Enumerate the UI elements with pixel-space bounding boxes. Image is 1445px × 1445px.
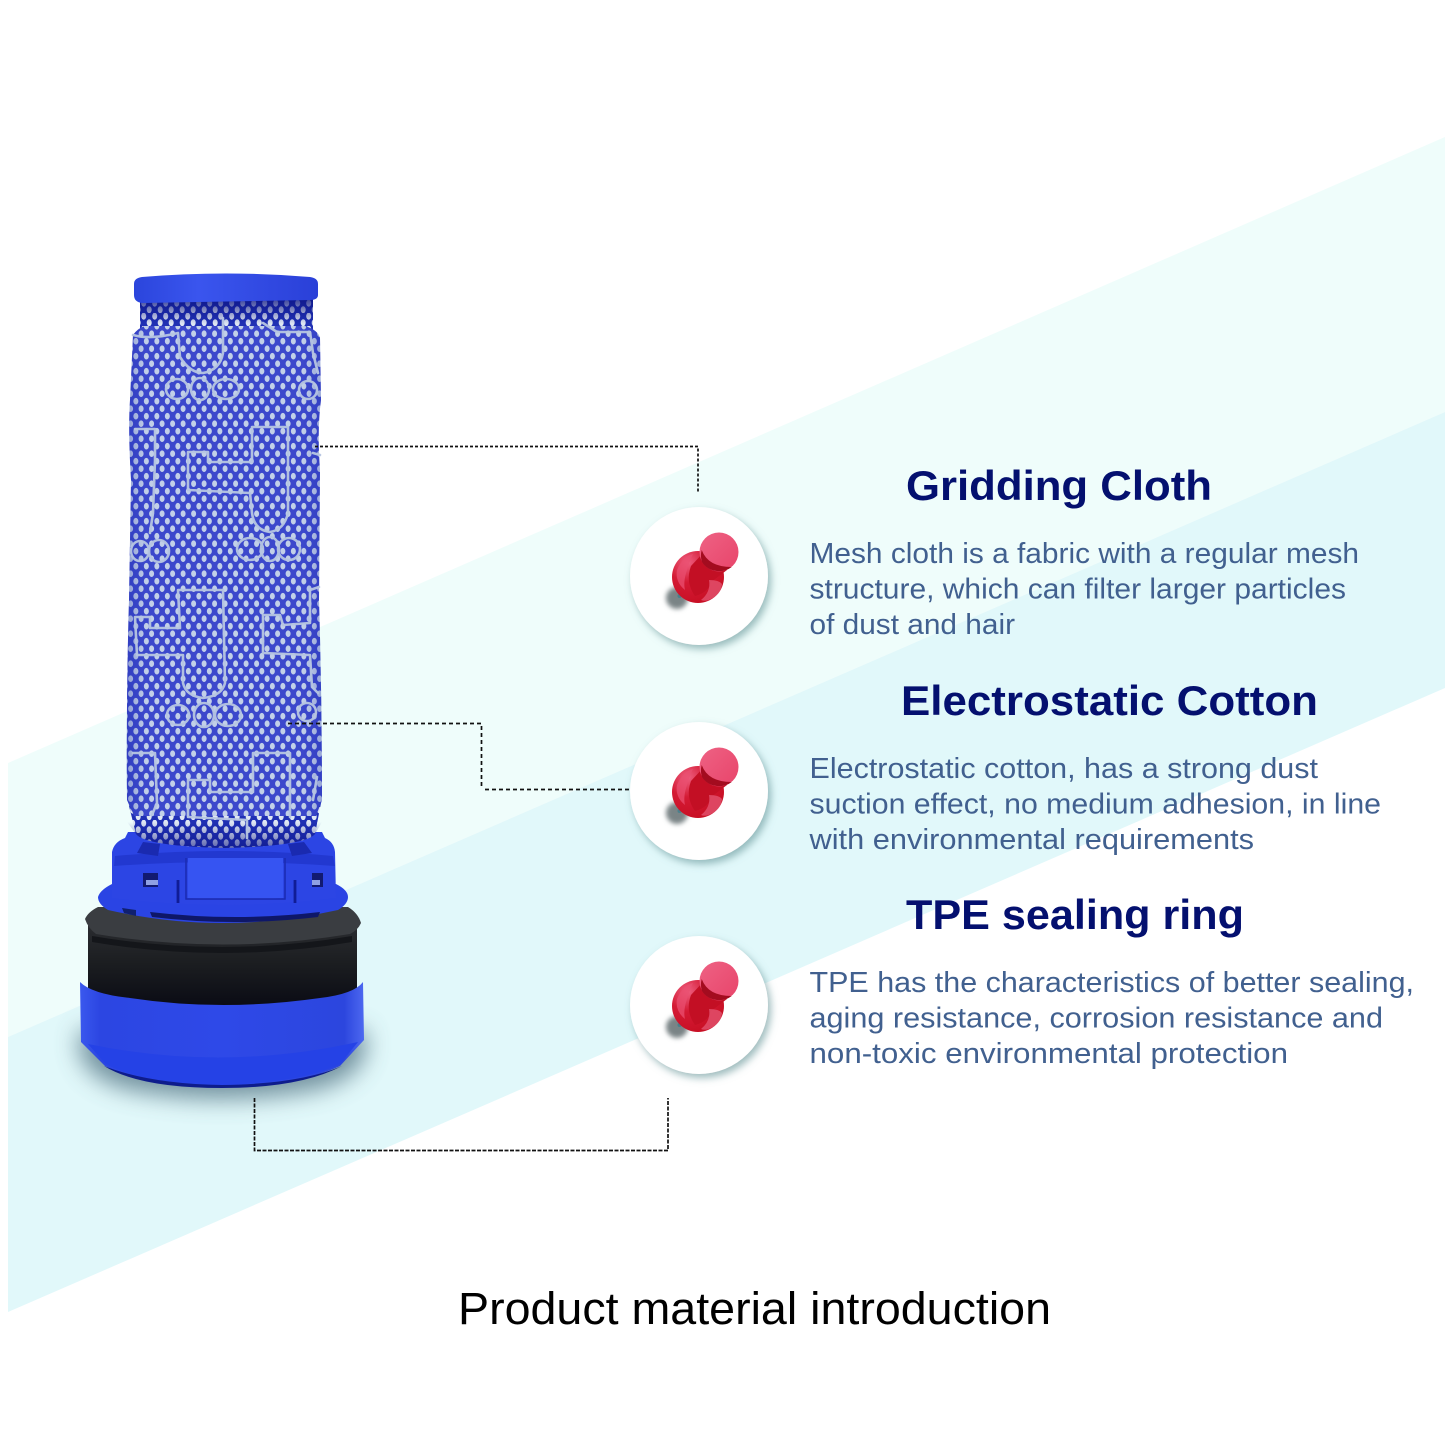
mesh neck (bottom) [127, 798, 322, 848]
text block: electrostatic cotton description [808, 753, 1381, 856]
pin marker 2 [630, 722, 768, 860]
text block: TPE sealing ring description: TPE has the characteristics of better sealing, [810, 967, 1414, 999]
text block: gridding cloth description: of dust and hair [810, 609, 1015, 641]
text block: electrostatic cotton description: Electrostatic cotton, has a strong dust [810, 753, 1318, 785]
flange [98, 884, 348, 923]
text block: gridding cloth description: Mesh cloth is a fabric with a regular mesh [810, 538, 1359, 570]
blue bottom base [80, 982, 364, 1086]
text block: TPE sealing ring description: aging resistance, corrosion resistance and [810, 1002, 1383, 1034]
text block: gridding cloth description [810, 538, 1359, 641]
text block: gridding cloth description: structure, which can filter larger particles [810, 574, 1346, 606]
plastic crown [112, 832, 336, 905]
heading: TPE sealing ring: TPE sealing ring [906, 891, 1244, 938]
caption: Product material introduction: Product material introduction [458, 1283, 1051, 1334]
text block: TPE sealing ring description: non-toxic environmental protection [810, 1038, 1288, 1070]
top cap [134, 274, 318, 303]
heading: Gridding Cloth: Gridding Cloth [906, 462, 1212, 509]
pin marker 3 [630, 936, 768, 1074]
TPE sealing ring [85, 907, 361, 1007]
dashed leader: TPE sealing ring [254, 1098, 668, 1150]
dashed leader: electrostatic cotton [288, 724, 629, 790]
text block: electrostatic cotton description: with environmental requirements [808, 824, 1254, 856]
gridding cloth body with mesh [127, 326, 322, 816]
heading: Electrostatic Cotton: Electrostatic Cotton [901, 677, 1318, 724]
base drop shadow [79, 1030, 366, 1099]
dashed leader: gridding cloth [315, 446, 698, 493]
mesh neck (top) [140, 298, 313, 336]
pin marker 1 [630, 507, 768, 645]
text block: TPE sealing ring description [810, 967, 1414, 1070]
product: cylindrical vacuum filter [79, 274, 366, 1099]
text block: electrostatic cotton description: suction effect, no medium adhesion, in line [810, 788, 1381, 820]
printed pale motif lines on the cloth [131, 318, 320, 838]
